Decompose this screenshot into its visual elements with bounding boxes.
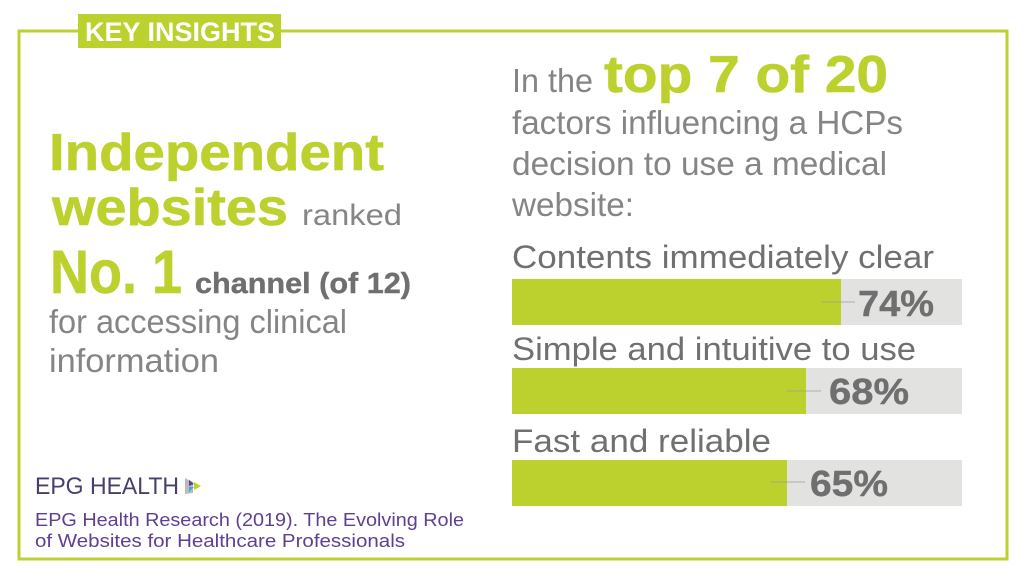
heading: independent websites: websites (51, 179, 288, 237)
right intro text (511, 46, 903, 223)
bar: fast and reliable 65% (512, 423, 962, 506)
bar chart (512, 239, 962, 506)
heading: independent websites: Independent (49, 124, 384, 182)
heading: independent websites (49, 124, 384, 237)
text: factors description (511, 104, 903, 223)
text: channel (of 12): channel (of 12) (195, 268, 411, 300)
tag: key insights: KEY INSIGHTS (85, 17, 275, 47)
left text block (49, 124, 411, 379)
text: factors description: factors influencing a HCPs (512, 104, 903, 141)
text: factors description: website: (511, 186, 634, 223)
bar: simple and intuitive to use 68%: 68% (829, 371, 909, 412)
citation (35, 509, 464, 551)
bar: contents immediately clear 74% (512, 239, 962, 325)
bar: fast and reliable 65%: 65% (810, 463, 888, 504)
bar: contents immediately clear 74%: Contents immediately clear (512, 239, 934, 275)
text: in the: In the (512, 62, 593, 99)
text: for accessing clinical information: information (49, 342, 219, 379)
heading: no. 1: No. 1 (50, 238, 182, 306)
icon: logo triangle (185, 478, 201, 494)
citation: of Websites for Healthcare Professionals (35, 530, 405, 551)
text: ranked: ranked (302, 199, 402, 232)
bar: simple and intuitive to use 68%: Simple and intuitive to use (512, 331, 916, 367)
bar: fast and reliable 65%: Fast and reliable (512, 423, 771, 459)
citation: EPG Health Research (2019). The Evolving Role (35, 509, 464, 530)
text: factors description: decision to use a medical (512, 145, 887, 182)
text: for accessing clinical information: for accessing clinical (49, 303, 347, 340)
text: for accessing clinical information (49, 303, 347, 379)
heading: top 7 of 20: top 7 of 20 (604, 46, 888, 104)
bar: simple and intuitive to use 68% (512, 331, 962, 414)
logo: EPG Health: EPG HEALTH (35, 473, 179, 500)
bar: contents immediately clear 74%: 74% (858, 283, 934, 324)
